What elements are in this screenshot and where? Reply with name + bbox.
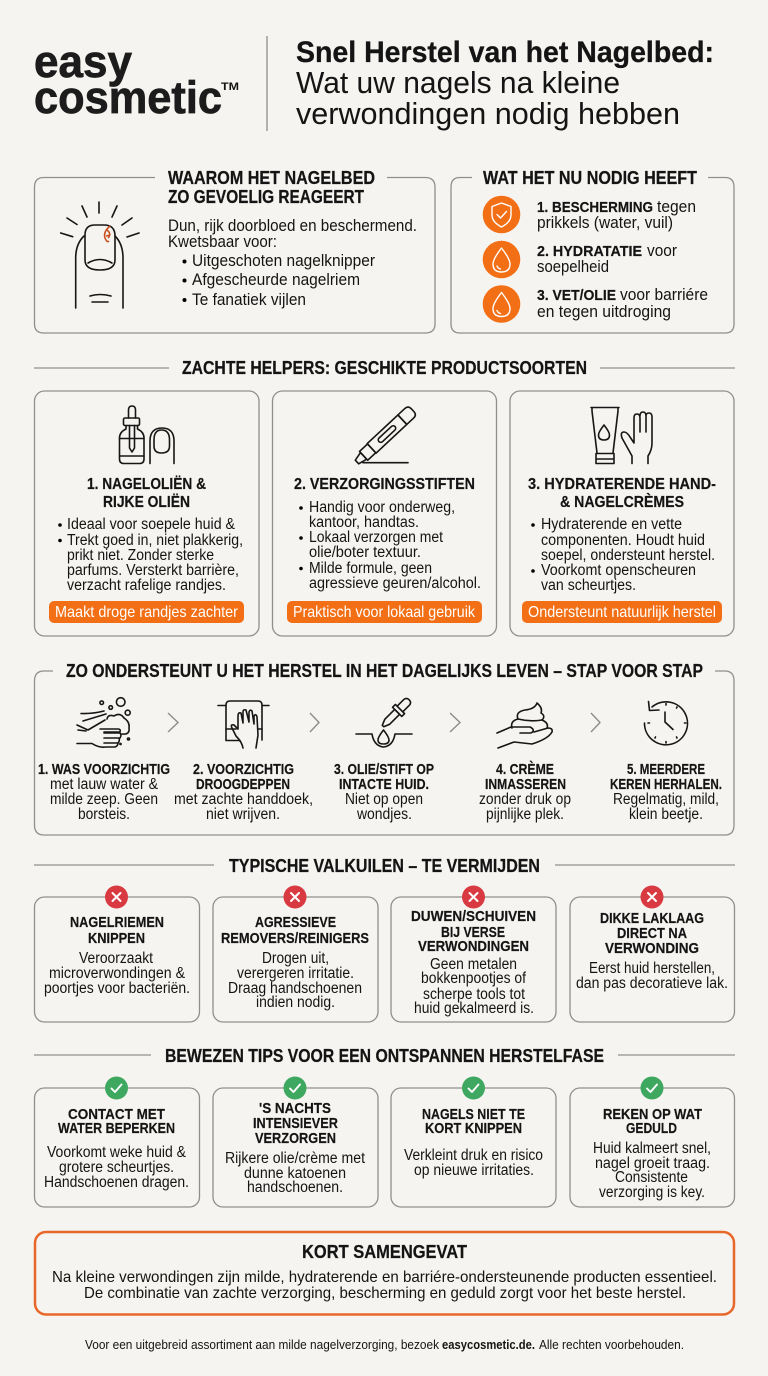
panel: wat het nu nodig heeft — [451, 167, 734, 333]
item: hydratatie — [537, 242, 677, 276]
icon: green check — [105, 1076, 128, 1100]
item: hydratatie: soepelheid — [537, 258, 609, 276]
icon: cream on hand — [497, 703, 552, 748]
icon: red cross — [462, 886, 485, 908]
step 3 text: Niet op open — [345, 791, 423, 808]
text: kwetsbaarheid: Uitgeschoten nagelknipper — [192, 252, 375, 270]
text: duwen en schuiven — [411, 908, 536, 1017]
heading: waarom: ZO GEVOELIG REAGEERT — [168, 186, 365, 207]
arrow: step 2 to 3 — [310, 713, 319, 732]
icon: red cross — [105, 886, 128, 908]
logo: cosmetic — [34, 72, 222, 123]
step 2 text: DROOGDEPPEN — [196, 776, 290, 793]
step 4 text: pijnlijke plek. — [486, 806, 564, 823]
text: agressieve removers: AGRESSIEVE — [255, 914, 336, 931]
icon: finger with injured nail — [61, 202, 139, 308]
item: vet en olie: en tegen uitdroging — [537, 303, 671, 321]
heading: kort samengevat: KORT SAMENGEVAT — [302, 1241, 468, 1262]
heading: waarom: WAAROM HET NAGELBED — [168, 167, 375, 188]
step 4 text — [479, 761, 571, 823]
text: samenvatting: De combinatie van zachte verzorging, bescherming en geduld zorgt voor het beste herstel. — [84, 1285, 686, 1302]
text: reken op wat geduld — [593, 1106, 711, 1201]
text: dikke laklaag: dan pas decoratieve lak. — [576, 975, 728, 992]
title: Wat uw nagels na kleine — [296, 65, 620, 100]
text: kwetsbaarheid — [168, 217, 417, 309]
heading: typische valkuilen: TYPISCHE VALKUILEN – TE VERMIJDEN — [229, 855, 540, 876]
text: 's nachts intensiever verzorgen — [225, 1100, 366, 1196]
text: 's nachts intensiever verzorgen: 'S NACHTS — [259, 1100, 331, 1117]
arrow: step 3 to 4 — [450, 713, 460, 732]
icon: red cross — [640, 886, 664, 908]
text: 's nachts intensiever verzorgen: handschoenen. — [247, 1179, 343, 1196]
card: reken op wat geduld — [570, 1076, 734, 1207]
text: agressieve removers: indien nodig. — [256, 994, 335, 1011]
text: card 1 bullets — [58, 516, 243, 594]
logo — [34, 36, 239, 123]
step 4 text: zonder druk op — [479, 791, 571, 808]
step 5 text: 5. MEERDERE — [627, 761, 705, 778]
panel: kort samengevat — [35, 1232, 734, 1314]
heading: waarom — [168, 167, 375, 207]
step 5 text: KEREN HERHALEN. — [610, 776, 722, 793]
text: card 1 bullets: verzacht rafelige randjes. — [67, 577, 226, 594]
step 3 text: INTACTE HUID. — [339, 776, 429, 793]
text: nagelriemen knippen: KNIPPEN — [88, 930, 145, 947]
icon: towel and hand — [218, 701, 269, 748]
text: reken op wat geduld: GEDULD — [626, 1120, 677, 1137]
panel: stap voor stap — [34, 660, 734, 835]
text: card 2 bullets — [299, 499, 481, 592]
icon: oil drop — [483, 285, 520, 323]
text: agressieve removers — [221, 914, 369, 1011]
text: nagels niet te kort knippen — [404, 1106, 543, 1179]
card: agressieve removers — [213, 886, 378, 1022]
icon: cream tube and hand — [591, 408, 652, 464]
icon: clock with return arrow — [644, 702, 687, 745]
step 5 text: klein beetje. — [629, 806, 703, 823]
text: contact met water beperken: WATER BEPERKEN — [58, 1120, 175, 1137]
step 3 text: wondjes. — [356, 806, 412, 823]
item: bescherming: 1. BESCHERMING — [537, 199, 653, 216]
text: agressieve removers: Drogen uit, — [262, 950, 329, 967]
step 1 text: met lauw water & — [50, 776, 159, 793]
text: 's nachts intensiever verzorgen: INTENSIEVER — [253, 1115, 338, 1132]
text: contact met water beperken: Handschoenen dragen. — [44, 1174, 189, 1191]
arrow: step 4 to 5 — [591, 713, 600, 732]
text: agressieve removers: Draag handschoenen — [228, 980, 362, 997]
text: nagelriemen knippen — [44, 914, 190, 997]
text: contact met water beperken: grotere scheurtjes. — [59, 1159, 174, 1176]
text: nagels niet te kort knippen: Verkleint druk en risico — [404, 1147, 543, 1164]
logo: easy — [34, 36, 132, 87]
step 3 text — [334, 761, 434, 823]
title — [296, 36, 714, 131]
text: reken op wat geduld: Consistente — [615, 1169, 688, 1186]
logo: TM — [221, 81, 239, 93]
heading: card 1: RIJKE OLIËN — [103, 493, 190, 511]
text: card 3 bullets — [531, 516, 715, 594]
icon: green check — [462, 1076, 485, 1100]
text: duwen en schuiven: bokkenpootjes of — [421, 970, 527, 987]
heading: card 3 — [528, 476, 716, 511]
step 1 text — [38, 761, 170, 823]
icon: red cross — [284, 886, 306, 908]
text: samenvatting: Na kleine verwondingen zijn milde, hydraterende en barriére-ondersteunende producten essentieel. — [52, 1269, 717, 1286]
text: kwetsbaarheid: Kwetsbaar voor: — [168, 233, 277, 251]
text: nagelriemen knippen: microverwondingen & — [49, 965, 186, 982]
text: kwetsbaarheid: Te fanatiek vijlen — [192, 291, 306, 309]
item: bescherming: prikkels (water, vuil) — [537, 214, 673, 232]
text: reken op wat geduld: nagel groeit traag. — [595, 1155, 710, 1172]
step 2 text: met zachte handdoek, — [174, 791, 313, 808]
text: duwen en schuiven: huid gekalmeerd is. — [414, 1000, 534, 1017]
step 2 text: niet wrijven. — [206, 806, 280, 823]
card: nagelriemen knippen — [34, 886, 200, 1022]
item: vet en olie — [537, 286, 708, 321]
text: duwen en schuiven: Geen metalen — [430, 956, 517, 973]
icon: green check — [640, 1076, 664, 1100]
text: contact met water beperken: CONTACT MET — [68, 1106, 165, 1123]
text: card 2 bullets: kantoor, handtas. — [309, 514, 419, 531]
text: 's nachts intensiever verzorgen: dunne katoenen — [244, 1165, 346, 1182]
text: agressieve removers: REMOVERS/REINIGERS — [221, 930, 369, 947]
panel: handcrèmes — [510, 391, 734, 636]
card: 's nachts intensiever verzorgen — [213, 1076, 378, 1207]
icon: green check — [284, 1076, 306, 1100]
text: card 1 bullets: parfums. Versterkt barrière, — [67, 562, 239, 579]
icon: care pen — [353, 405, 417, 467]
text: dikke laklaag: DIKKE LAKLAAG — [600, 910, 704, 927]
footer: Voor een uitgebreid assortiment aan milde nagelverzorging, bezoek — [85, 1338, 440, 1352]
text: card 2 bullets: Lokaal verzorgen met — [309, 529, 444, 546]
text: dikke laklaag: VERWONDING — [605, 940, 699, 957]
text: card 2 bullets: olie/boter textuur. — [309, 544, 421, 561]
step 3 text: 3. OLIE/STIFT OP — [334, 761, 434, 778]
text: duwen en schuiven: DUWEN/SCHUIVEN — [411, 908, 536, 925]
text: nagels niet te kort knippen: KORT KNIPPEN — [425, 1120, 522, 1137]
text: reken op wat geduld: REKEN OP WAT — [603, 1106, 702, 1123]
text: card 1 bullets: Ideaal voor soepele huid & — [67, 516, 236, 533]
text: dikke laklaag — [576, 910, 728, 992]
item: hydratatie: voor — [647, 242, 677, 260]
heading: card 1 — [87, 475, 206, 511]
text: nagels niet te kort knippen: op nieuwe irritaties. — [414, 1162, 534, 1179]
text: duwen en schuiven: VERWONDINGEN — [418, 938, 529, 955]
text: card 3 bullets: Voorkomt openscheuren — [541, 562, 696, 579]
text: dikke laklaag: DIRECT NA — [617, 925, 687, 942]
icon: dropper bottle and finger — [120, 406, 174, 464]
step 5 text: Regelmatig, mild, — [613, 791, 719, 808]
title: Snel Herstel van het Nagelbed: — [296, 36, 714, 69]
heading: card 3: 3. HYDRATERENDE HAND- — [528, 476, 716, 493]
card: nagels niet te kort knippen — [391, 1076, 556, 1207]
icon: dropper on skin — [356, 695, 414, 747]
text: duwen en schuiven: scherpe tools tot — [423, 986, 526, 1003]
card: dikke laklaag — [570, 886, 734, 1022]
item: vet en olie: voor barriére — [620, 286, 708, 304]
text: kwetsbaarheid: Afgescheurde nagelriem — [192, 271, 360, 289]
card: contact met water beperken — [34, 1076, 200, 1207]
text: samenvatting — [52, 1269, 717, 1302]
text: duwen en schuiven: BIJ VERSE — [441, 924, 505, 941]
heading: wat het nu nodig heeft: WAT HET NU NODIG HEEFT — [483, 167, 698, 188]
footer: easycosmetic.de. — [442, 1338, 535, 1352]
step 1 text: milde zeep. Geen — [50, 791, 158, 808]
text: card 2 bullets: agressieve geuren/alcohol. — [309, 575, 481, 592]
text: card 1 bullets: prikt niet. Zonder sterke — [67, 547, 214, 564]
text: reken op wat geduld: verzorging is key. — [599, 1184, 705, 1201]
heading: zachte helpers: ZACHTE HELPERS: GESCHIKTE PRODUCTSOORTEN — [182, 357, 587, 378]
item: hydratatie: 2. HYDRATATIE — [537, 243, 642, 260]
icon: shield — [483, 196, 520, 233]
text: nagelriemen knippen: NAGELRIEMEN — [70, 914, 164, 931]
text: reken op wat geduld: Huid kalmeert snel, — [593, 1140, 711, 1157]
text: card 1 bullets: Trekt goed in, niet plakkerig, — [67, 532, 243, 549]
item: bescherming: tegen — [657, 198, 696, 216]
heading: card 1: 1. NAGELOLIËN & — [87, 475, 206, 493]
footer: Alle rechten voorbehouden. — [539, 1338, 684, 1352]
panel: nageloliën — [34, 391, 259, 636]
icon: washing hands — [77, 698, 130, 747]
text: 's nachts intensiever verzorgen: Rijkere olie/crème met — [225, 1150, 366, 1167]
text: contact met water beperken — [44, 1106, 189, 1191]
card: duwen en schuiven — [391, 886, 556, 1022]
heading: card 3: & NAGELCRÈMES — [560, 492, 684, 511]
text: 's nachts intensiever verzorgen: VERZORGEN — [255, 1130, 336, 1147]
text: nagelriemen knippen: Veroorzaakt — [79, 950, 154, 967]
text: agressieve removers: verergeren irritatie. — [237, 965, 354, 982]
text: dikke laklaag: Eerst huid herstellen, — [589, 960, 715, 977]
footer — [85, 1338, 684, 1352]
icon: water drop — [483, 241, 520, 278]
step 1 text: 1. WAS VOORZICHTIG — [38, 761, 170, 778]
text: card 3 bullets: componenten. Houdt huid — [541, 532, 705, 549]
text: nagels niet te kort knippen: NAGELS NIET TE — [422, 1106, 525, 1123]
text: nagelriemen knippen: poortjes voor bacteriën. — [44, 980, 190, 997]
step 2 text: 2. VOORZICHTIG — [193, 761, 294, 778]
badge: card 1: Maakt droge randjes zachter — [55, 604, 239, 621]
item: bescherming — [537, 198, 696, 232]
text: card 3 bullets: van scheurtjes. — [541, 577, 636, 594]
step 1 text: borsteis. — [78, 806, 130, 823]
text: card 3 bullets: Hydraterende en vette — [541, 516, 682, 533]
heading: bewezen tips: BEWEZEN TIPS VOOR EEN ONTSPANNEN HERSTELFASE — [165, 1045, 604, 1066]
step 5 text — [610, 761, 722, 823]
step 4 text: INMASSEREN — [485, 776, 566, 793]
step 4 text: 4. CRÈME — [496, 761, 554, 778]
panel: verzorgingsstiften — [272, 391, 496, 636]
arrow: step 1 to 2 — [168, 713, 178, 732]
item: vet en olie: 3. VET/OLIE — [537, 287, 616, 304]
badge: card 2: Praktisch voor lokaal gebruik — [293, 604, 476, 621]
step 2 text — [174, 761, 313, 823]
text: contact met water beperken: Voorkomt weke huid & — [47, 1144, 187, 1161]
heading: card 2: 2. VERZORGINGSSTIFTEN — [294, 476, 475, 493]
text: card 3 bullets: soepel, ondersteunt herstel. — [541, 547, 715, 564]
text: card 2 bullets: Milde formule, geen — [309, 560, 432, 577]
text: kwetsbaarheid: Dun, rijk doorbloed en beschermend. — [168, 217, 417, 235]
text: card 2 bullets: Handig voor onderweg, — [309, 499, 455, 516]
badge: card 3: Ondersteunt natuurlijk herstel — [528, 604, 716, 621]
title: verwondingen nodig hebben — [296, 96, 680, 131]
panel: waarom het nagelbed — [34, 167, 435, 333]
